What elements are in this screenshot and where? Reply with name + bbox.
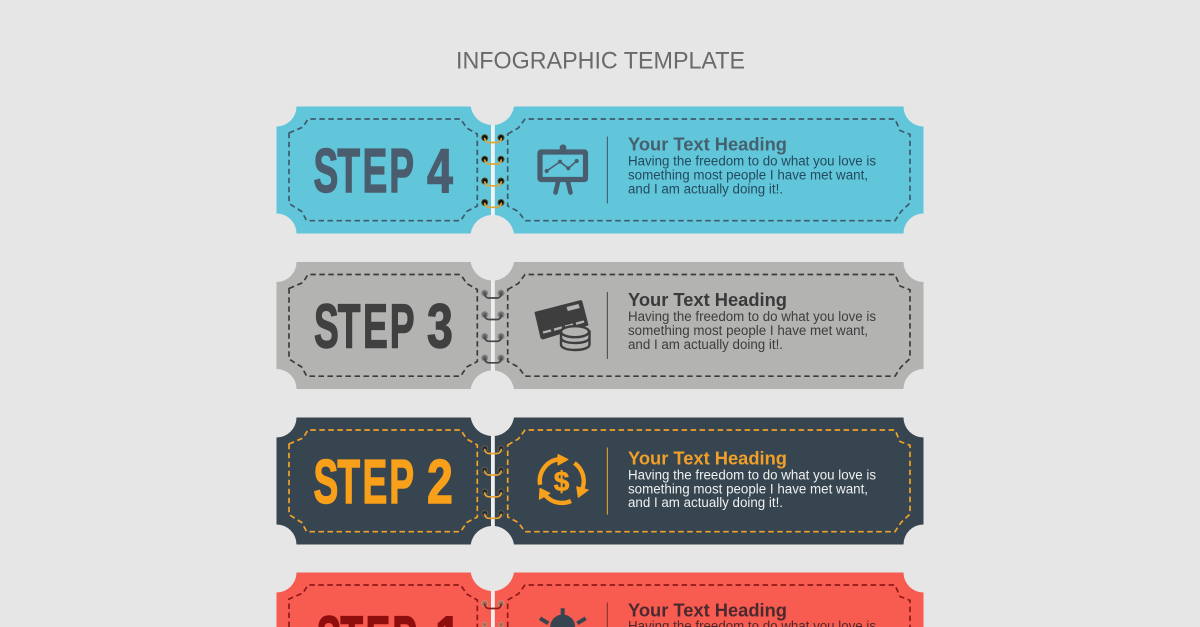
ticket body: step 2 <box>276 418 924 544</box>
step 3 label: STEP <box>314 292 415 361</box>
icon: card and coins <box>535 301 590 350</box>
text block: step 4: and I am actually doing it!. <box>628 182 783 196</box>
text block: step 2: something most people I have met want, <box>628 481 868 496</box>
step 2 label: 2 <box>427 446 453 517</box>
text block: step 4: something most people I have met want, <box>628 168 868 183</box>
text block: step 1: Your Text Heading <box>628 600 787 620</box>
step 2 label: STEP <box>314 447 414 516</box>
step 4 label: STEP <box>314 136 414 206</box>
panel: step 3 ticket <box>276 262 924 389</box>
title: INFOGRAPHIC TEMPLATE <box>456 48 745 74</box>
icon: circular dollar arrows <box>539 454 588 503</box>
step 3 label: 3 <box>427 291 453 361</box>
ticket body: step 3 <box>276 262 924 389</box>
text block: step 2: and I am actually doing it!. <box>628 495 783 510</box>
text block: step 2 <box>628 448 876 510</box>
text block: step 3: Your Text Heading <box>628 289 787 310</box>
ticket body: step 1 <box>276 572 924 627</box>
text block: step 4: Having the freedom to do what you love is <box>628 154 876 169</box>
panel: step 2 ticket <box>276 418 924 544</box>
ticket body: step 4 <box>276 106 924 234</box>
text block: step 3: and I am actually doing it!. <box>628 337 783 352</box>
text block: step 3: something most people I have met want, <box>628 323 868 338</box>
icon: presentation board <box>540 144 586 192</box>
icon: circular dollar arrows: $ <box>554 466 570 497</box>
panel: step 4 ticket <box>276 106 924 234</box>
text block: step 2: Your Text Heading <box>628 448 787 468</box>
text block: step 3 <box>628 289 876 352</box>
step 1 label <box>316 603 461 627</box>
panel: step 1 ticket <box>276 572 924 627</box>
text block: step 4 <box>628 134 876 196</box>
text block: step 1 <box>628 600 876 627</box>
icon: light bulb <box>540 608 586 627</box>
text block: step 2: Having the freedom to do what you love is <box>628 467 876 482</box>
text block: step 4: Your Text Heading <box>628 134 787 155</box>
text block: step 3: Having the freedom to do what you love is <box>628 309 876 324</box>
step 4 label: 4 <box>427 136 453 206</box>
